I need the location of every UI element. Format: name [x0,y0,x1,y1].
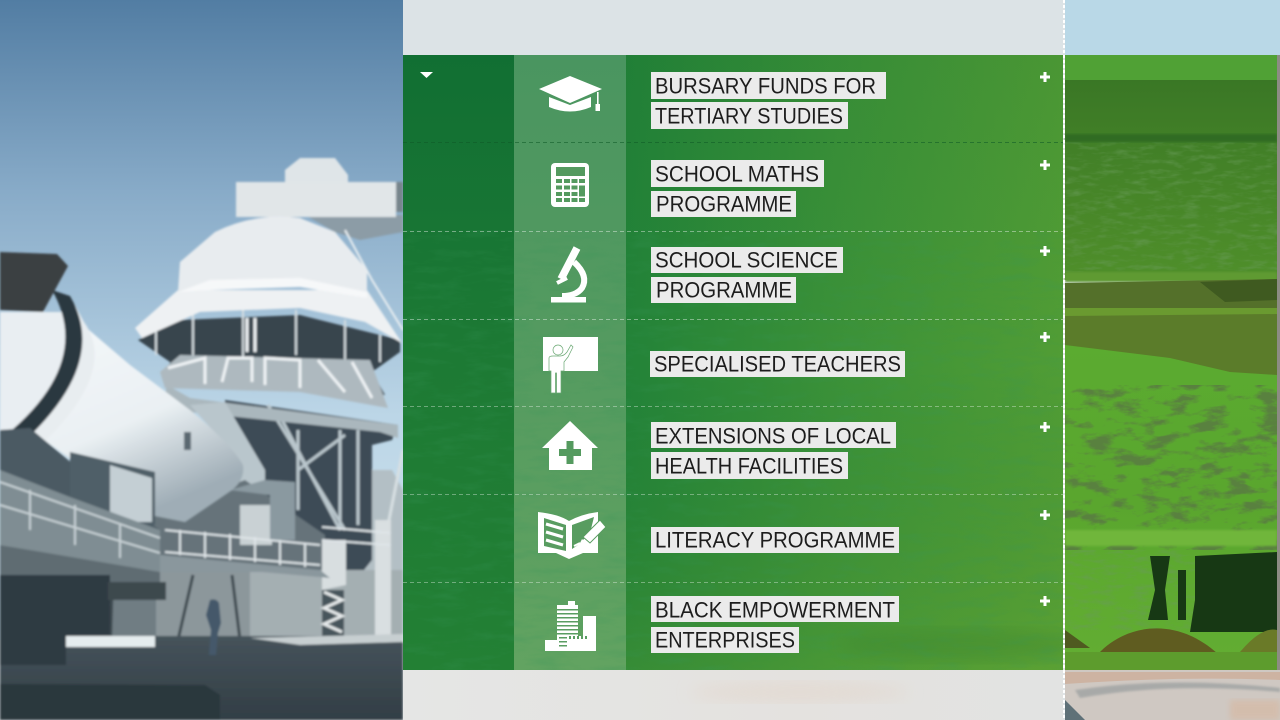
texture: mottled rock overlay [403,230,1063,670]
rotary kiln [30,318,243,522]
backdrop strip: bottom snow [403,670,1063,720]
icon: graduation cap [539,76,602,112]
label: bursary funds: TERTIARY STUDIES [655,104,843,128]
icon: health facility house [542,421,598,470]
quarry rock texture [1065,385,1277,550]
label: literacy programme: LITERACY PROGRAMME [655,528,895,552]
tower lower [220,400,398,600]
hopper [0,252,68,312]
icon: calculator [551,163,589,207]
label: school science: PROGRAMME [656,278,792,302]
backdrop strip: top [403,0,1063,55]
label: health facilities: HEALTH FACILITIES [655,454,843,478]
cliff face texture [1065,550,1195,630]
platform base building [155,570,403,638]
label: school maths: PROGRAMME [656,192,792,216]
ground [0,636,403,720]
worker [206,599,221,655]
panel: green programme list [403,55,1080,670]
backdrop strip: bottom right rock [1065,670,1280,720]
frame under canopy [138,315,400,395]
column: text band [626,55,1080,670]
icon: microscope [551,248,586,302]
backdrop strip: top right sky [1065,0,1280,55]
label: school maths: SCHOOL MATHS [655,162,819,186]
label: health facilities: EXTENSIONS OF LOCAL [655,424,891,448]
shaded mid structure behind rails [150,480,325,578]
photo: cement plant [0,0,403,720]
icon: teacher at board [543,337,598,393]
label: health facilities [651,422,896,479]
spoil mound [1098,628,1218,654]
label: black empowerment [651,596,899,653]
label: specialised teachers: SPECIALISED TEACHERS [654,352,901,376]
label: black empowerment: BLACK EMPOWERMENT [655,598,895,622]
label: school maths [651,160,824,217]
row dividers [403,142,1063,582]
cliff dark patch [1148,552,1277,632]
deck [165,385,398,438]
dark supports under kiln [0,428,160,550]
dashed vertical divider [1063,0,1065,720]
back building [340,470,403,640]
cabin [70,452,155,525]
expand icons: plus signs [1040,72,1050,606]
icon: collapse arrow [420,72,433,78]
column: icon band [514,55,626,670]
icon: open book and pencil [538,512,606,559]
quarry lit terrace [1065,530,1277,546]
lower kiln platform [0,470,160,572]
duct [190,402,265,490]
railing [160,355,388,408]
label: bursary funds [651,72,886,129]
label: school science [651,247,843,303]
label: school science: SCHOOL SCIENCE [655,248,838,272]
label: bursary funds: BURSARY FUNDS FOR [655,74,876,98]
icon: office buildings [545,601,596,651]
label: black empowerment: ENTERPRISES [655,628,795,652]
column: left band [403,55,514,670]
panel: green-tinted quarry landscape [1065,55,1280,670]
canopy [135,290,402,343]
